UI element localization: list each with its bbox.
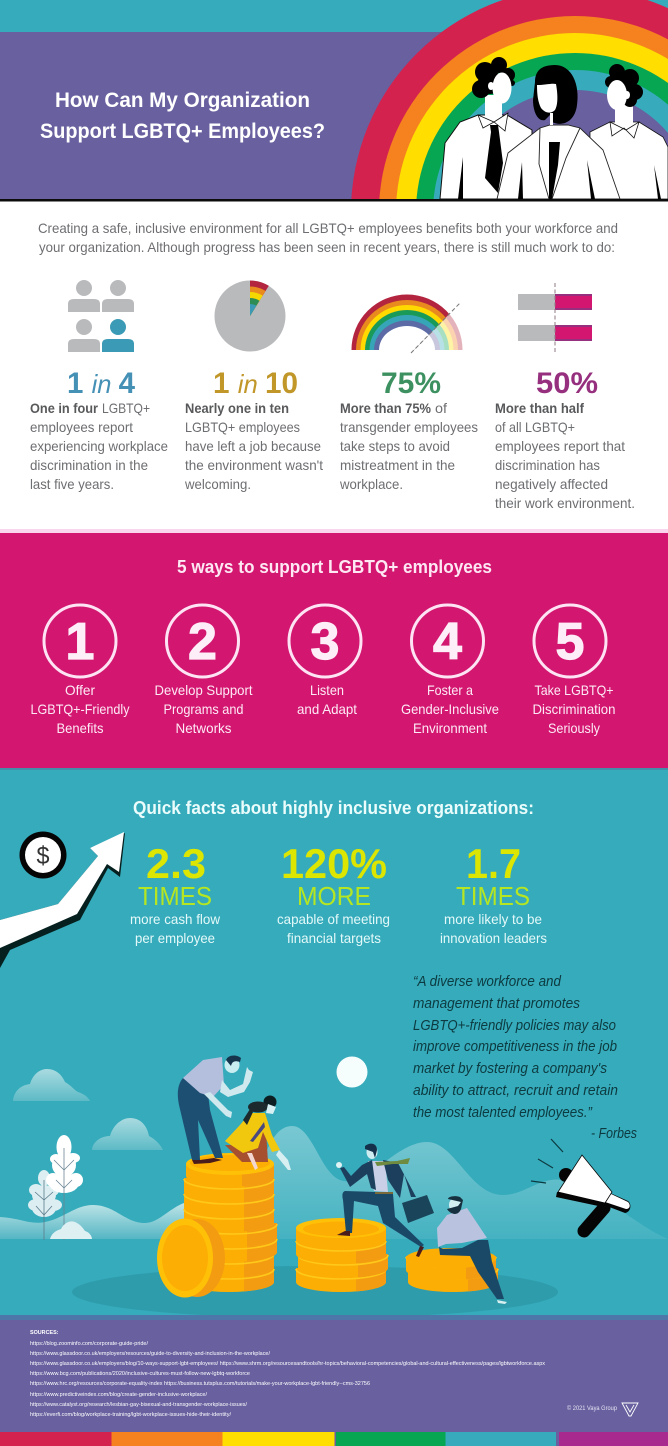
fact: 120% more: 120% xyxy=(281,840,387,887)
description xyxy=(339,400,478,492)
way 1: Offer xyxy=(65,682,95,698)
description: discrimination has xyxy=(495,457,600,473)
tree: large xyxy=(46,1135,83,1240)
sources list: https://everfi.com/blog/workplace-training/lgbt-workplace-issues-hide-their-identity/ xyxy=(30,1412,232,1418)
way 3: and Adapt xyxy=(297,701,357,717)
figure: seated bearded man xyxy=(437,1196,507,1304)
description: One in four xyxy=(30,400,98,416)
quote: management that promotes xyxy=(413,996,580,1012)
way 1: Benefits xyxy=(56,720,104,736)
description: transgender employees xyxy=(340,419,478,435)
description: their work environment. xyxy=(495,495,635,511)
way 2: Develop Support xyxy=(154,682,253,698)
icon: dollar coin xyxy=(20,832,66,878)
number: 50%: 50% xyxy=(536,367,598,400)
description: welcoming. xyxy=(184,476,251,492)
fact: 120% more xyxy=(277,840,390,946)
fact: 2.3 times: 2.3 xyxy=(146,840,206,887)
description: employees report xyxy=(30,419,133,435)
sources list: https://blog.zoominfo.com/corporate-guide-pride/ xyxy=(30,1341,149,1347)
illustration: left man xyxy=(440,57,532,199)
fact: 2.3 times: TIMES xyxy=(138,881,212,911)
fact: 1.7 times: more likely to be xyxy=(444,911,542,927)
rainbow footer bar xyxy=(0,1432,668,1446)
fact: 1.7 times: 1.7 xyxy=(466,840,521,887)
number: 1 in 10: 1 in 10 xyxy=(213,367,298,400)
way 3 xyxy=(289,605,361,717)
coin stack: middle xyxy=(296,1218,388,1292)
coin stack: short xyxy=(406,1248,498,1292)
cloud xyxy=(13,1069,90,1101)
icon: dollar coin: $ xyxy=(36,842,50,870)
icon: partial rainbow xyxy=(352,294,462,354)
description xyxy=(495,400,635,511)
way 2: Networks xyxy=(176,720,232,736)
illustration: woman xyxy=(497,65,620,199)
sources list xyxy=(30,1330,545,1418)
description: experiencing workplace xyxy=(30,438,168,454)
way 4: Gender-Inclusive xyxy=(401,701,499,717)
description: discrimination in the xyxy=(30,457,148,473)
description: mistreatment in the xyxy=(340,457,455,473)
moon xyxy=(336,1056,368,1088)
sources list: https://www.hrc.org/resources/corporate-equality-index https://business.tutsplus.com/tutorials/make-your-workplace-lgbt-friendly--cms-32756 xyxy=(30,1381,370,1387)
sources list: https://www.bcg.com/publications/2020/inclusive-cultures-must-follow-new-lgbtq-workforce xyxy=(30,1371,250,1377)
description: the environment wasn't xyxy=(185,457,323,473)
intro paragraph xyxy=(38,220,618,255)
number: 75%: 75% xyxy=(381,367,441,400)
intro paragraph: Creating a safe, inclusive environment for all LGBTQ+ employees benefits both your workforce and xyxy=(38,220,618,236)
briefcase xyxy=(402,1195,434,1223)
panel: statistic one in four xyxy=(30,280,168,492)
way 1: LGBTQ+-Friendly xyxy=(30,701,130,717)
ground shadow xyxy=(72,1266,558,1318)
way 3: Listen xyxy=(310,682,344,698)
way 2 xyxy=(154,605,253,736)
bush xyxy=(50,1221,92,1239)
title xyxy=(40,89,325,143)
arrow: rising trend xyxy=(0,832,125,968)
illustration: right man xyxy=(590,64,668,199)
sources list: https://www.catalyst.org/research/lesbian-gay-bisexual-and-transgender-workplace-issues/ xyxy=(30,1402,247,1408)
quote: the most talented employees.” xyxy=(413,1105,593,1121)
fact: 120% more: MORE xyxy=(297,881,371,911)
fact: 1.7 times: TIMES xyxy=(456,881,530,911)
description: take steps to avoid xyxy=(340,438,450,454)
heading: 5 ways to support LGBTQ+ employees xyxy=(177,557,492,577)
way 5 xyxy=(532,605,616,736)
quote: “A diverse workforce and xyxy=(413,974,562,990)
rainbow arc xyxy=(351,0,668,199)
description: of xyxy=(435,400,447,416)
quote: LGBTQ+-friendly policies may also xyxy=(413,1018,616,1034)
illustration: landscape xyxy=(0,1056,668,1318)
way 4: Foster a xyxy=(427,682,473,698)
way 5: 5 xyxy=(556,613,584,671)
title: How Can My Organization xyxy=(55,89,310,112)
way 2: 2 xyxy=(188,613,217,671)
logo: Vaya xyxy=(622,1403,638,1416)
fact: 2.3 times xyxy=(130,840,221,946)
sources list: https://www.predictiveindex.com/blog/create-gender-inclusive-workplace/ xyxy=(30,1392,208,1398)
description: LGBTQ+ xyxy=(102,400,150,416)
heading: Quick facts about highly inclusive organizations: xyxy=(133,798,534,818)
icon: four people xyxy=(68,280,134,352)
description: have left a job because xyxy=(185,438,321,454)
sources list: SOURCES: xyxy=(30,1330,59,1336)
sources list: https://www.glassdoor.co.uk/employers/blog/10-ways-support-lgbt-employees/ https://www.shrm.org/resourcesandtools/hr-topics/behavioral-competencies/global-and-cultural-effectiveness/pages/lgbtworkforce.aspx xyxy=(30,1361,545,1367)
description: Nearly one in ten xyxy=(185,400,289,416)
panel: sources footer xyxy=(0,1315,668,1432)
way 1 xyxy=(30,605,130,736)
panel: quick facts xyxy=(0,768,668,1318)
way 5: Seriously xyxy=(548,720,600,736)
fact: 2.3 times: per employee xyxy=(135,930,215,946)
title: Support LGBTQ+ Employees? xyxy=(40,120,325,143)
tree: small xyxy=(28,1170,62,1240)
fact: 1.7 times xyxy=(440,840,547,946)
number: 1 in 4: 1 in 4 xyxy=(67,367,135,400)
fact: 120% more: capable of meeting xyxy=(277,911,390,927)
panel: statistic 75 percent xyxy=(339,294,478,492)
way 1: 1 xyxy=(66,613,94,671)
sources list: https://www.glassdoor.co.uk/employers/resources/guide-to-diversity-and-inclusion-in-the-workplace/ xyxy=(30,1351,270,1357)
way 3: 3 xyxy=(311,613,339,671)
icon: half-filled bars xyxy=(518,283,592,352)
description: employees report that xyxy=(495,438,625,454)
panel: 5 ways xyxy=(0,529,668,768)
header rule xyxy=(0,199,668,202)
quote: - Forbes xyxy=(591,1126,637,1142)
panel: statistic one in ten xyxy=(184,280,323,492)
description: of all LGBTQ+ xyxy=(495,419,575,435)
description: More than 75% xyxy=(340,400,431,416)
icon: pie chart xyxy=(214,280,286,352)
necktie xyxy=(485,125,503,193)
icon: megaphone xyxy=(531,1139,630,1231)
copyright: © 2021 Vaya Group xyxy=(567,1405,618,1412)
figure: man bending xyxy=(178,1056,253,1164)
fact: 120% more: financial targets xyxy=(287,930,381,946)
way 5: Take LGBTQ+ xyxy=(534,682,614,698)
figure: man running with briefcase xyxy=(336,1144,434,1257)
coin stack: tall xyxy=(184,1153,277,1292)
way 4: Environment xyxy=(413,720,487,736)
fact: 2.3 times: more cash flow xyxy=(130,911,221,927)
fact: 1.7 times: innovation leaders xyxy=(440,930,547,946)
description: workplace. xyxy=(339,476,403,492)
way 4: 4 xyxy=(433,613,462,671)
description: negatively affected xyxy=(495,476,608,492)
description xyxy=(184,400,323,492)
way 4 xyxy=(401,605,499,736)
cloud xyxy=(92,1118,163,1150)
way 5: Discrimination xyxy=(532,701,616,717)
quote: market by fostering a company's xyxy=(413,1061,607,1077)
figure: woman with yellow jacket xyxy=(225,1096,291,1170)
quote: improve competitiveness in the job xyxy=(413,1039,617,1055)
intro paragraph: your organization. Although progress has been seen in recent years, there is still much work to do: xyxy=(39,239,615,255)
panel: header banner xyxy=(0,0,668,199)
way 2: Programs and xyxy=(164,701,244,717)
description: More than half xyxy=(495,400,584,416)
coin: leaning front xyxy=(157,1218,225,1298)
description: last five years. xyxy=(30,476,114,492)
description: LGBTQ+ employees xyxy=(185,419,300,435)
quote xyxy=(413,974,637,1142)
description xyxy=(30,400,168,492)
quote: ability to attract, recruit and retain xyxy=(413,1083,618,1099)
panel: statistic 50 percent xyxy=(495,283,635,511)
